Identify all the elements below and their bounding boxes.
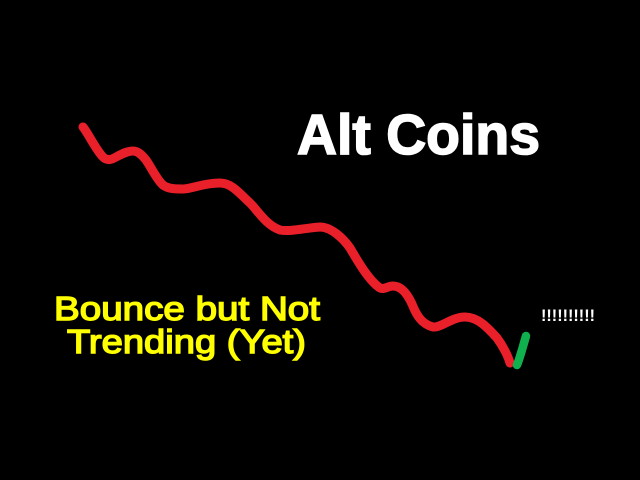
caption line 2: Trending (Yet) — [67, 323, 306, 360]
yellow caption: Bounce but Not Trending (Yet) — [54, 290, 320, 360]
exclamation marks: !!!!!!!!!! — [541, 306, 595, 325]
red downtrend price line — [83, 127, 510, 363]
title: Alt Coins: Alt Coins — [297, 103, 540, 167]
green bounce line — [517, 336, 526, 365]
caption line 1: Bounce but Not — [54, 290, 320, 327]
